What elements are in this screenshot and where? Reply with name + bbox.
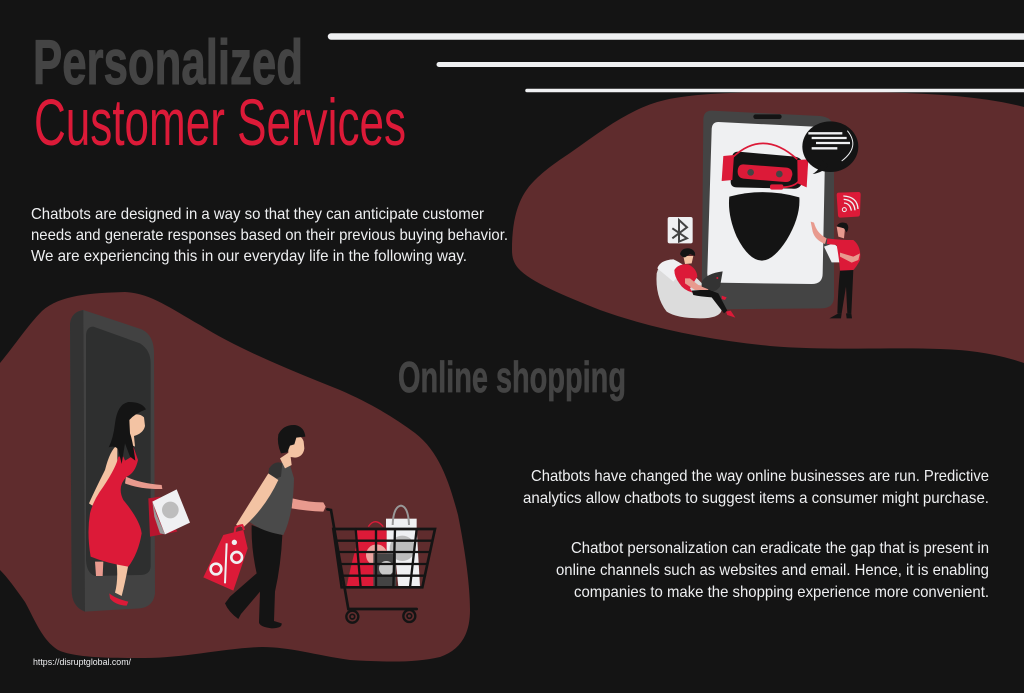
intro text block: Chatbots are designed in a way so that they can anticipate customer xyxy=(31,206,484,223)
title xyxy=(33,28,406,159)
phone screen xyxy=(707,122,825,284)
shopping cart xyxy=(327,509,435,623)
text block: predictive analytics xyxy=(523,468,989,507)
person standing xyxy=(811,222,860,318)
panel: bottom left blob xyxy=(0,292,470,662)
icon: bluetooth xyxy=(668,217,693,243)
phone side xyxy=(70,310,85,612)
intro text block: We are experiencing this in our everyday life in the following way. xyxy=(31,248,467,265)
title line: Customer Services: Customer Services xyxy=(34,85,406,159)
shopping bags xyxy=(148,489,190,537)
heading: Online shopping: Online shopping xyxy=(398,353,626,402)
text block: personalization: companies to make the shopping experience more convenient. xyxy=(574,584,989,601)
text block: personalization: online channels such as websites and email. Hence, it is enabling xyxy=(556,562,989,579)
text block: predictive analytics: Chatbots have changed the way online businesses are run. Predictive xyxy=(531,468,989,485)
phone body xyxy=(702,111,834,309)
panel: top right blob xyxy=(512,92,1024,363)
text block: personalization: Chatbot personalization can eradicate the gap that is present in xyxy=(571,540,989,557)
icon: wifi xyxy=(837,192,861,218)
text block: personalization xyxy=(556,540,989,601)
robot xyxy=(722,143,808,261)
illustration: woman leaving phone xyxy=(70,310,190,612)
man xyxy=(225,425,326,628)
intro text block xyxy=(31,206,508,265)
cart contents xyxy=(347,506,420,587)
source url: https://disruptglobal.com/ xyxy=(33,657,131,668)
percent tag xyxy=(203,525,248,591)
speech bubble xyxy=(802,121,858,174)
illustration: man with shopping cart xyxy=(203,425,435,628)
decorative lines top right xyxy=(331,36,1024,90)
person on bean bag xyxy=(656,248,735,318)
intro text block: needs and generate responses based on their previous buying behavior. xyxy=(31,227,508,244)
phone screen xyxy=(86,327,151,576)
phone body xyxy=(70,310,155,612)
phone speaker xyxy=(753,114,782,119)
title line: Personalized: Personalized xyxy=(33,28,303,98)
illustration: chatbot phone with two people xyxy=(656,111,861,318)
text block: predictive analytics: analytics allow chatbots to suggest items a consumer might purchase. xyxy=(523,490,989,507)
woman xyxy=(88,402,162,606)
